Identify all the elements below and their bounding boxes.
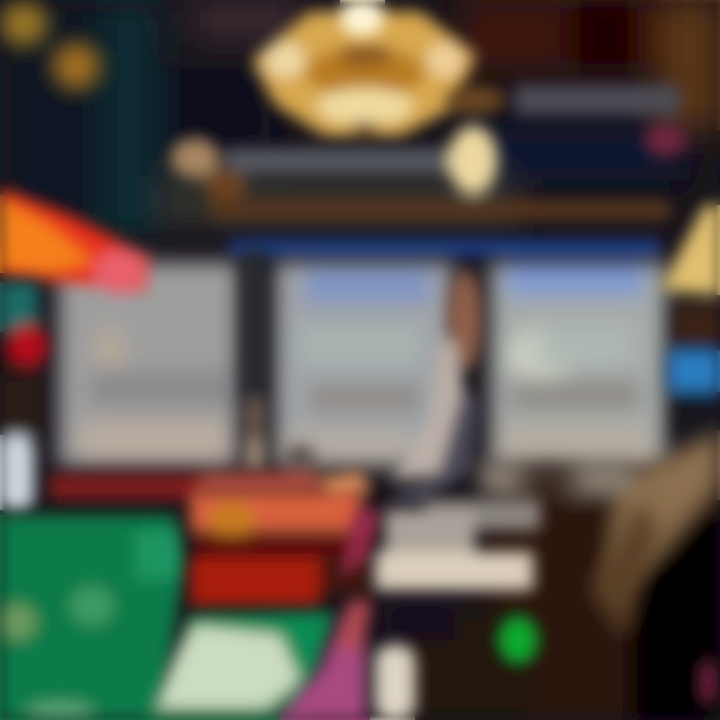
brown diagonal strip xyxy=(590,500,660,640)
central figure xyxy=(385,270,482,505)
ceiling lights left xyxy=(0,2,100,90)
upper bands xyxy=(171,85,685,256)
right lamp and figure xyxy=(660,205,720,440)
pink sash xyxy=(275,510,382,720)
lower floor and right dark area xyxy=(385,430,720,720)
green dot xyxy=(498,616,538,664)
ceiling background xyxy=(0,0,720,240)
chandelier xyxy=(252,12,476,136)
red stacked object xyxy=(190,492,370,606)
green table xyxy=(0,515,185,720)
red-orange awning xyxy=(0,188,150,294)
left edge figures xyxy=(0,282,48,510)
pillar xyxy=(242,250,266,470)
windows xyxy=(58,262,666,467)
red counter band xyxy=(50,444,372,505)
white cup and base xyxy=(375,500,540,720)
chandelier top highlight xyxy=(340,0,384,36)
pink glow lower right xyxy=(698,658,718,706)
second green table xyxy=(150,612,335,720)
